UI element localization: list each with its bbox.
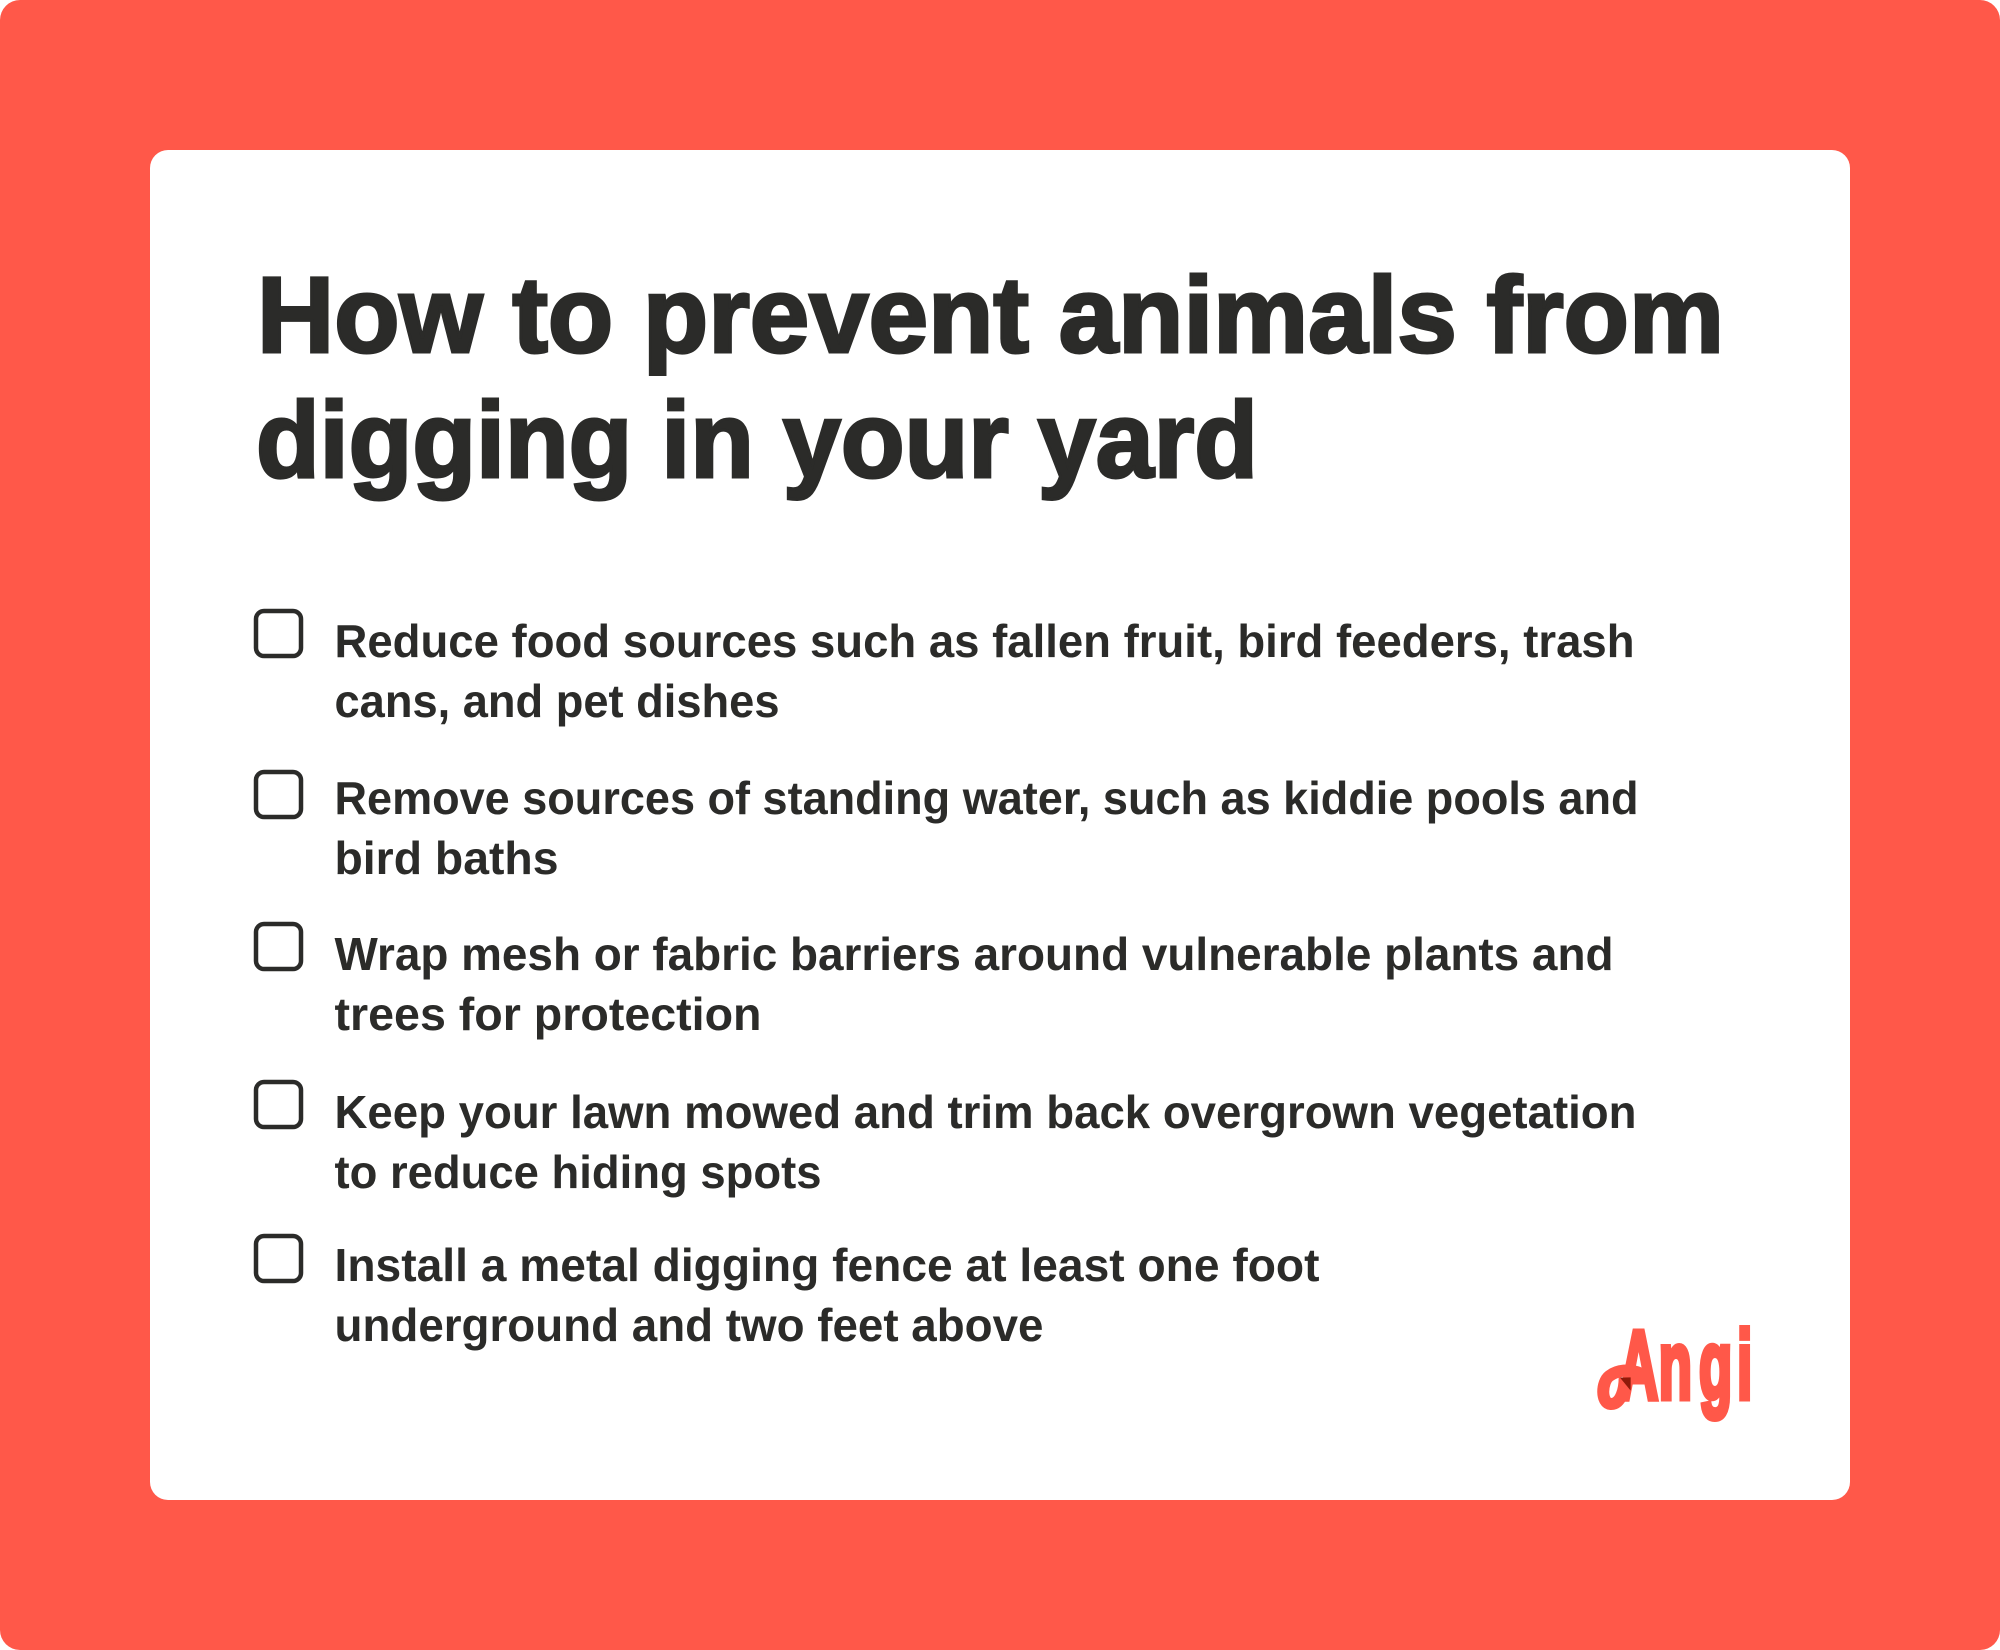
title: How to prevent animals from	[257, 254, 1724, 375]
checklist item 4	[256, 1082, 1636, 1198]
checklist item 3: Wrap mesh or fabric barriers around vulnerable plants and	[334, 928, 1614, 980]
checklist item 2: bird baths	[334, 832, 558, 884]
checklist item 1: Reduce food sources such as fallen fruit, bird feeders, trash	[334, 615, 1634, 667]
title: digging in your yard	[256, 379, 1258, 500]
checklist item 2	[256, 772, 1638, 884]
checklist item 5: Install a metal digging fence at least one foot	[334, 1239, 1320, 1291]
title	[256, 254, 1724, 500]
checklist item 4: Keep your lawn mowed and trim back overgrown vegetation	[334, 1086, 1636, 1138]
checklist item 5	[256, 1236, 1320, 1351]
checklist item 3	[256, 924, 1614, 1040]
logo: Angi: Angi	[1619, 1311, 1752, 1419]
checklist item 2: Remove sources of standing water, such as kiddie pools and	[334, 772, 1638, 824]
panel: checklist card	[150, 150, 1850, 1500]
checklist item 5: underground and two feet above	[334, 1299, 1044, 1351]
checklist item 3: trees for protection	[334, 988, 762, 1040]
checklist item 1: cans, and pet dishes	[334, 675, 780, 727]
checklist item 4: to reduce hiding spots	[334, 1146, 822, 1198]
checklist item 1	[256, 611, 1634, 727]
